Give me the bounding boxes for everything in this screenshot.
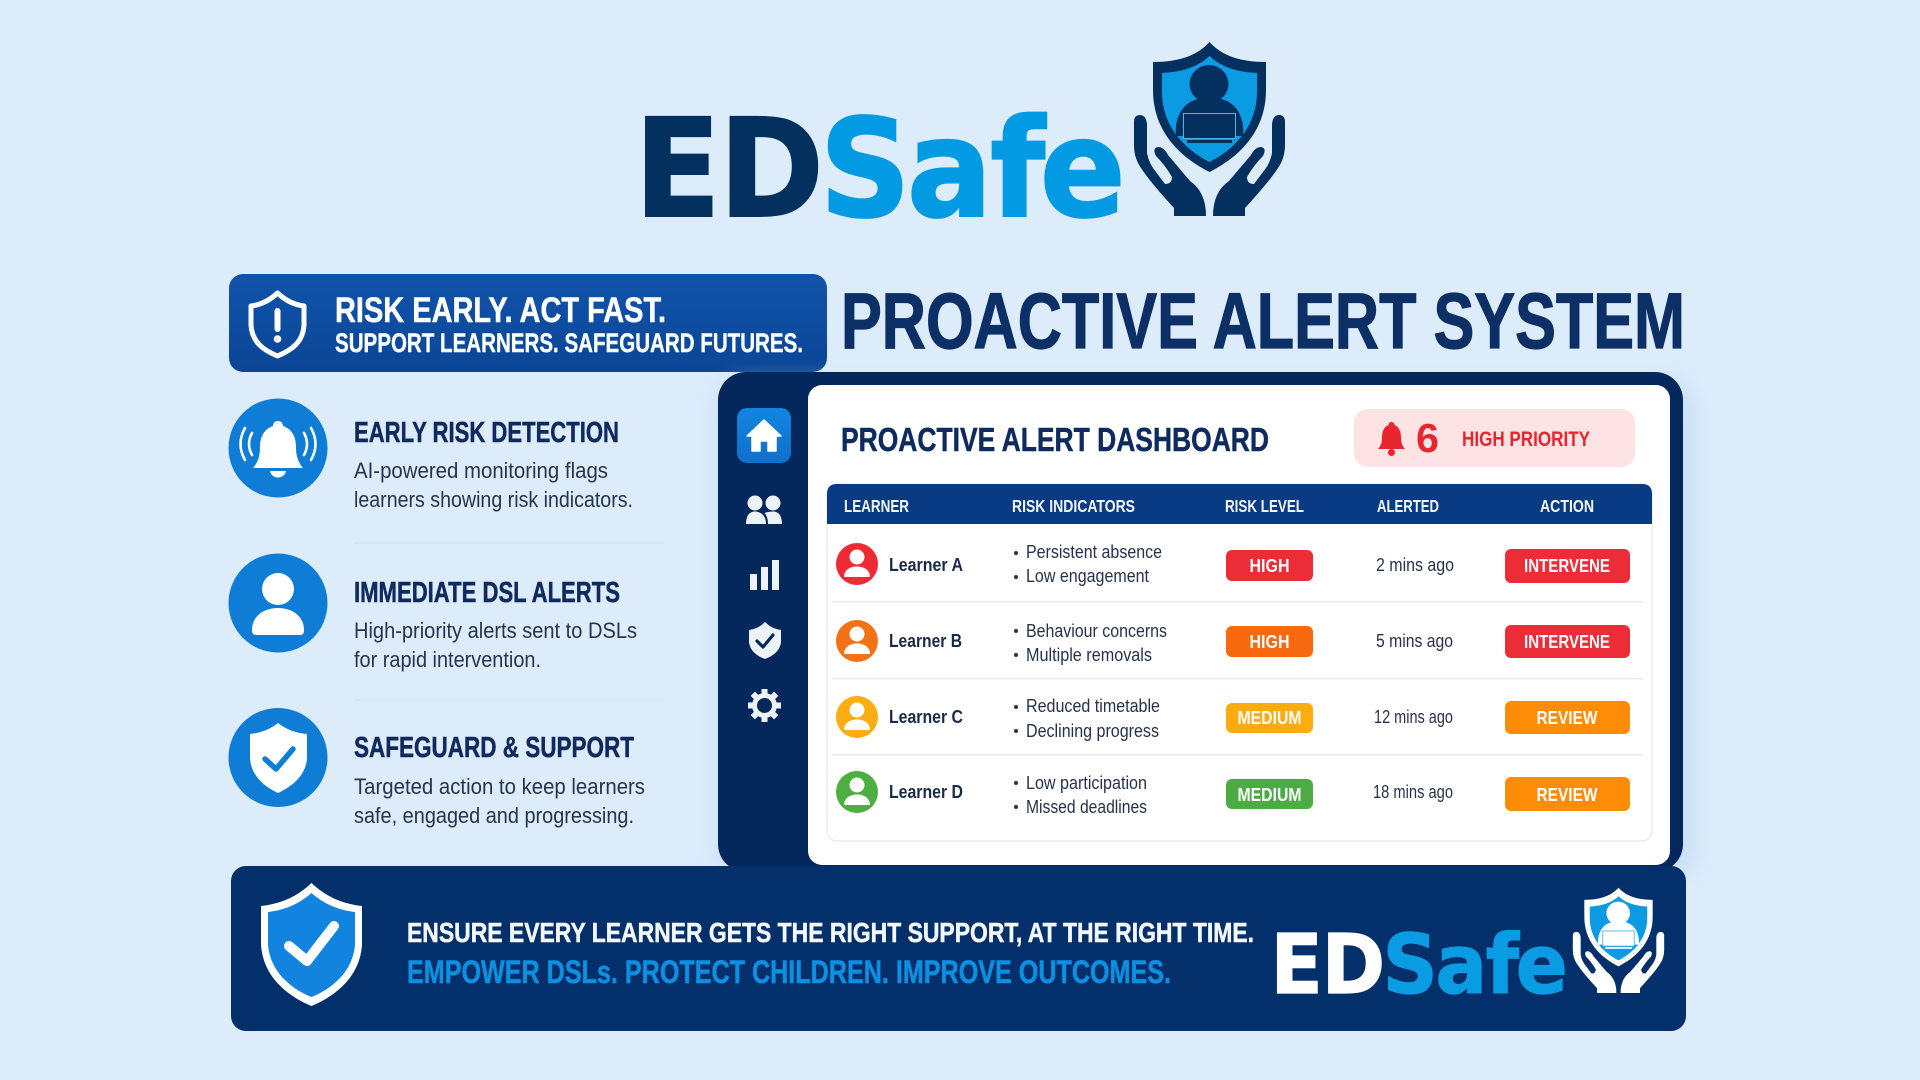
risk level — [1226, 779, 1313, 809]
icon: home button — [737, 408, 791, 463]
logo: EDSafe — [634, 42, 1285, 248]
row: learner D: 18 mins ago — [1373, 782, 1453, 802]
row: learner A: 2 mins ago — [1376, 555, 1454, 575]
description: safe, engaged and progressing. — [354, 803, 634, 828]
action button — [1505, 625, 1630, 658]
risk level: MEDIUM — [1238, 708, 1302, 728]
heading: EARLY RISK DETECTION — [354, 417, 619, 449]
dashboard title: PROACTIVE ALERT DASHBOARD — [841, 422, 1269, 459]
logo icon: shield and hands — [1134, 42, 1285, 216]
icon: people — [746, 496, 782, 524]
feature: immediate DSL alerts — [228, 554, 637, 672]
table header: ALERTED — [1377, 496, 1439, 516]
reversed wordmark — [1271, 916, 1568, 1013]
call to action line two: EMPOWER DSLs. PROTECT CHILDREN. IMPROVE OUTCOMES. — [407, 954, 1171, 990]
description — [354, 458, 633, 512]
logo wordmark — [634, 90, 1126, 248]
table: learner alerts — [827, 484, 1652, 841]
avatar — [836, 696, 878, 738]
risk level: HIGH — [1250, 632, 1290, 652]
row: learner C — [836, 696, 1630, 741]
feature: early risk detection — [228, 398, 633, 512]
avatar — [836, 543, 878, 585]
description: AI-powered monitoring flags — [354, 458, 608, 483]
banner: bottom call to action — [231, 866, 1686, 1031]
risk indicators: Low participation — [1026, 773, 1147, 793]
description — [354, 618, 637, 672]
icon: alert shield — [251, 293, 304, 356]
icon: person — [228, 554, 328, 652]
risk indicators — [1014, 773, 1147, 817]
logo: reversed EDSafe — [1271, 888, 1664, 1013]
description: Targeted action to keep learners — [354, 774, 645, 799]
action button — [1505, 701, 1630, 734]
action button: REVIEW — [1536, 708, 1598, 728]
logo wordmark: Safe — [820, 90, 1126, 248]
description: High-priority alerts sent to DSLs — [354, 618, 637, 643]
risk level: HIGH — [1250, 556, 1290, 576]
table header: RISK LEVEL — [1225, 496, 1304, 516]
risk indicators: Persistent absence — [1026, 542, 1162, 562]
row: learner B — [836, 620, 1630, 665]
row: learner C: 12 mins ago — [1374, 707, 1453, 727]
risk indicators: Low engagement — [1026, 566, 1149, 586]
icon: bar chart — [750, 560, 779, 590]
risk level — [1226, 550, 1313, 581]
table header — [827, 484, 1652, 524]
row: learner D — [836, 771, 1630, 817]
risk indicators: Behaviour concerns — [1026, 621, 1167, 641]
logo wordmark: ED — [634, 90, 824, 248]
action button: INTERVENE — [1524, 632, 1610, 652]
risk indicators: Reduced timetable — [1026, 696, 1160, 716]
heading: IMMEDIATE DSL ALERTS — [354, 577, 620, 609]
table header: LEARNER — [844, 496, 909, 516]
row: learner C: Learner C — [889, 707, 963, 727]
avatar — [836, 620, 878, 662]
risk indicators: Missed deadlines — [1026, 797, 1147, 817]
reversed wordmark: ED — [1271, 916, 1385, 1013]
call to action line one: ENSURE EVERY LEARNER GETS THE RIGHT SUPPORT, AT THE RIGHT TIME. — [407, 917, 1254, 948]
row: learner A: Learner A — [889, 555, 963, 575]
icon: shield check — [749, 622, 781, 659]
table header: RISK INDICATORS — [1012, 496, 1135, 516]
row: learner D: Learner D — [889, 782, 963, 802]
title: proactive alert system: PROACTIVE ALERT SYSTEM — [841, 276, 1685, 365]
action button — [1505, 777, 1630, 811]
icon: red bell — [1378, 422, 1405, 456]
action button: INTERVENE — [1524, 556, 1610, 576]
heading: SAFEGUARD & SUPPORT — [354, 732, 634, 764]
high priority badge — [1354, 409, 1635, 467]
action button — [1505, 549, 1630, 583]
badge label: HIGH PRIORITY — [1462, 427, 1590, 451]
description: learners showing risk indicators. — [354, 487, 633, 512]
risk level: MEDIUM — [1238, 785, 1302, 805]
banner headline: RISK EARLY. ACT FAST. — [335, 291, 666, 330]
panel: dashboard content — [808, 385, 1670, 865]
risk level — [1226, 703, 1313, 733]
icon: large shield with check — [261, 883, 362, 1006]
risk indicators — [1014, 696, 1160, 741]
row: learner B: Learner B — [889, 631, 962, 651]
icon: shield with check — [228, 708, 328, 807]
avatar — [836, 771, 878, 813]
description — [354, 774, 645, 828]
icon: bell — [228, 398, 328, 498]
risk level — [1226, 626, 1313, 657]
row: learner B: 5 mins ago — [1376, 631, 1453, 651]
reversed wordmark: Safe — [1383, 916, 1568, 1013]
description: for rapid intervention. — [354, 647, 541, 672]
table header: ACTION — [1540, 496, 1594, 516]
sidebar navigation — [737, 408, 791, 722]
icon: gear — [748, 689, 781, 722]
action button: REVIEW — [1536, 785, 1598, 805]
feature: safeguard and support — [228, 708, 645, 828]
banner: risk early, act fast — [229, 274, 827, 372]
risk indicators: Multiple removals — [1026, 645, 1152, 665]
row: learner A — [836, 542, 1630, 586]
panel: dashboard window — [718, 372, 1683, 872]
risk indicators: Declining progress — [1026, 721, 1159, 741]
risk indicators — [1014, 621, 1167, 665]
alert count: 6 — [1416, 415, 1439, 461]
banner subline: SUPPORT LEARNERS. SAFEGUARD FUTURES. — [335, 328, 803, 358]
risk indicators — [1014, 542, 1162, 586]
logo icon: reversed shield and hands — [1573, 888, 1664, 993]
